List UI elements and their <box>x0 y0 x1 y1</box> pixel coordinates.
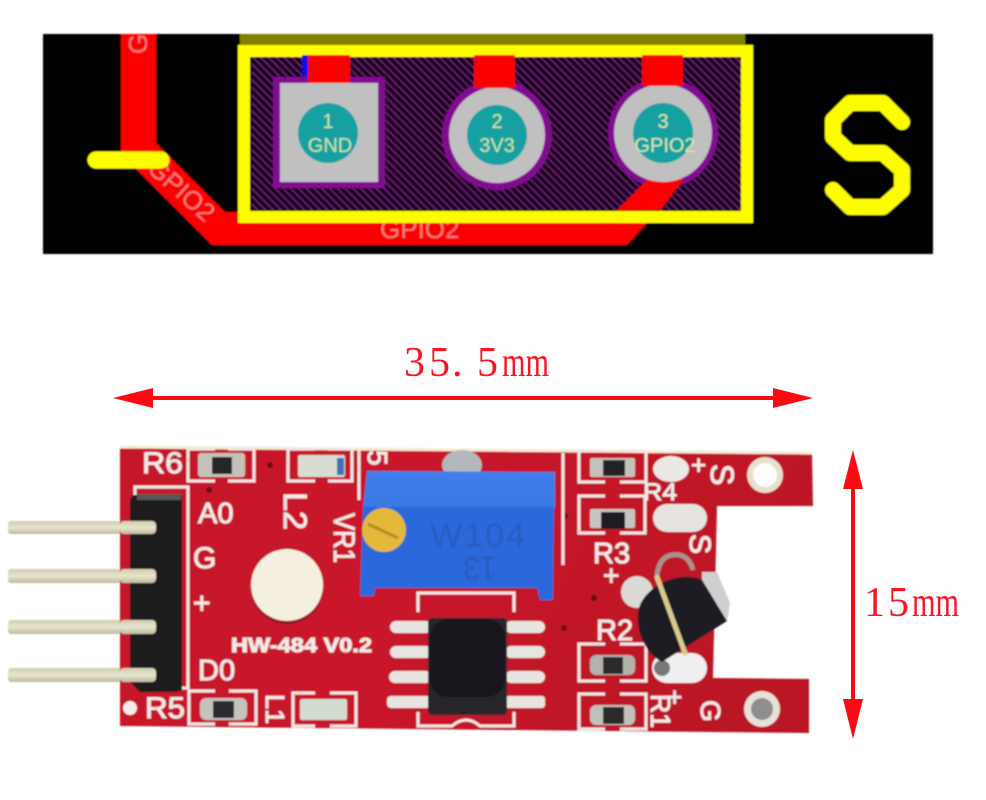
cream mounting pad <box>251 549 323 621</box>
temperature sensor TO-92 <box>638 555 730 662</box>
width value unit: mm <box>502 340 549 386</box>
label G bottom: G <box>695 700 726 722</box>
trimmer top face <box>363 471 555 508</box>
label G: G <box>193 542 216 575</box>
trimmer marking W104: W104 <box>430 517 525 555</box>
sensor black body <box>638 577 727 662</box>
trimmer marking 13: 13 <box>463 550 497 586</box>
height value digits: 15 <box>864 580 909 626</box>
sensor gold wire <box>657 577 685 653</box>
panel: PCB footprint layout <box>43 34 933 254</box>
pin 2 round pad 3V3: 3V3 <box>479 135 515 157</box>
height arrow <box>843 450 863 739</box>
label R3: R3 <box>593 538 630 570</box>
red GPIO2 trace <box>121 34 648 245</box>
silkscreen labels right side <box>593 450 740 728</box>
chip silkscreen outline <box>418 593 514 726</box>
trimmer silkscreen outline <box>359 450 563 565</box>
pin 2 round pad 3V3: 2 <box>491 111 503 133</box>
pin 3 round pad GPIO2: GPIO2 <box>634 135 696 157</box>
pin 1 square pad GND: 1 <box>322 111 334 133</box>
label plus by R3: + <box>603 560 619 591</box>
black pin header <box>130 495 182 692</box>
label R2: R2 <box>596 615 633 647</box>
hatched connector body <box>252 55 742 210</box>
resistor R6 <box>188 449 254 481</box>
label L2: L2 <box>277 492 313 530</box>
board vias <box>206 462 597 631</box>
olive top bar <box>240 34 745 46</box>
solder pad middle <box>621 576 653 608</box>
LED L2 <box>288 449 352 481</box>
resistor R5 <box>189 691 256 724</box>
header top highlight <box>137 494 181 500</box>
chip body <box>428 618 507 715</box>
silkscreen labels left side <box>142 447 393 725</box>
chip left leads <box>387 621 432 708</box>
pin 1 square pad GND <box>273 55 385 188</box>
mounting hole shadow <box>251 552 323 624</box>
label R1: R1 <box>645 694 676 728</box>
SOIC-8 chip <box>387 618 545 715</box>
small white dot <box>123 701 137 715</box>
header pins <box>8 521 156 682</box>
label D0: D0 <box>198 655 235 687</box>
trimmer top screw <box>442 450 482 480</box>
trace label G: G <box>123 34 153 54</box>
label S middle: S <box>683 534 716 554</box>
sensor lead loop <box>657 555 693 575</box>
LED L1 <box>293 693 356 726</box>
chip top face <box>430 619 505 697</box>
solder slot upper <box>653 504 707 532</box>
trimmer screw slot <box>368 524 398 538</box>
trace label GPIO2: GPIO2 <box>380 214 459 244</box>
top mounting hole <box>747 457 783 493</box>
bottom mounting hole <box>744 691 780 727</box>
height dimension: 15mm <box>843 450 959 739</box>
label 5: 5 <box>362 450 393 466</box>
solder blob lower <box>654 660 670 676</box>
label plus top: + <box>691 450 706 480</box>
pin 2 round pad 3V3 <box>442 55 552 190</box>
height value unit: mm <box>912 580 959 626</box>
trace label diagonal GPIO2: GPIO2 <box>142 152 221 228</box>
label R6: R6 <box>142 447 183 480</box>
label plus: + <box>193 587 211 620</box>
resistor R2 <box>579 644 646 681</box>
label VR1: VR1 <box>327 513 360 563</box>
pin 3 round pad GPIO2 <box>608 55 718 210</box>
pin 3 round pad GPIO2: 3 <box>657 111 669 133</box>
pin tips over header <box>120 521 156 682</box>
resistor R1 <box>579 694 646 729</box>
label A0: A0 <box>198 498 233 530</box>
model label: HW-484 V0.2 <box>231 635 372 657</box>
silkscreen S shape <box>833 103 902 207</box>
trimmer adjust screw <box>362 508 406 552</box>
width value digits: 35.5 <box>404 340 498 386</box>
pin 1 square pad GND: GND <box>308 135 352 157</box>
solder pad top <box>653 456 689 482</box>
label R4: R4 <box>643 479 677 506</box>
PCB black background <box>43 34 933 254</box>
panel: HW-484 sensor module photo <box>8 447 813 733</box>
resistor R4 <box>579 451 646 482</box>
red circuit board <box>120 447 813 733</box>
solder slot lower <box>652 653 707 683</box>
width arrow <box>113 388 813 408</box>
label S top: S <box>704 464 740 485</box>
sensor grey top <box>702 572 730 621</box>
resistor R3 <box>579 496 645 533</box>
pin header silkscreen outline <box>135 487 188 688</box>
label R5: R5 <box>145 692 185 725</box>
yellow connector outline <box>244 51 747 217</box>
board top edge highlight <box>120 447 812 453</box>
yellow pin marker <box>96 152 161 168</box>
label plus bottom: + <box>667 682 682 712</box>
width dimension: 35.5mm <box>113 340 813 408</box>
blue trimmer potentiometer <box>360 471 555 600</box>
chip right leads <box>505 621 545 708</box>
label L1: L1 <box>260 694 290 724</box>
trimmer front face <box>360 507 554 600</box>
